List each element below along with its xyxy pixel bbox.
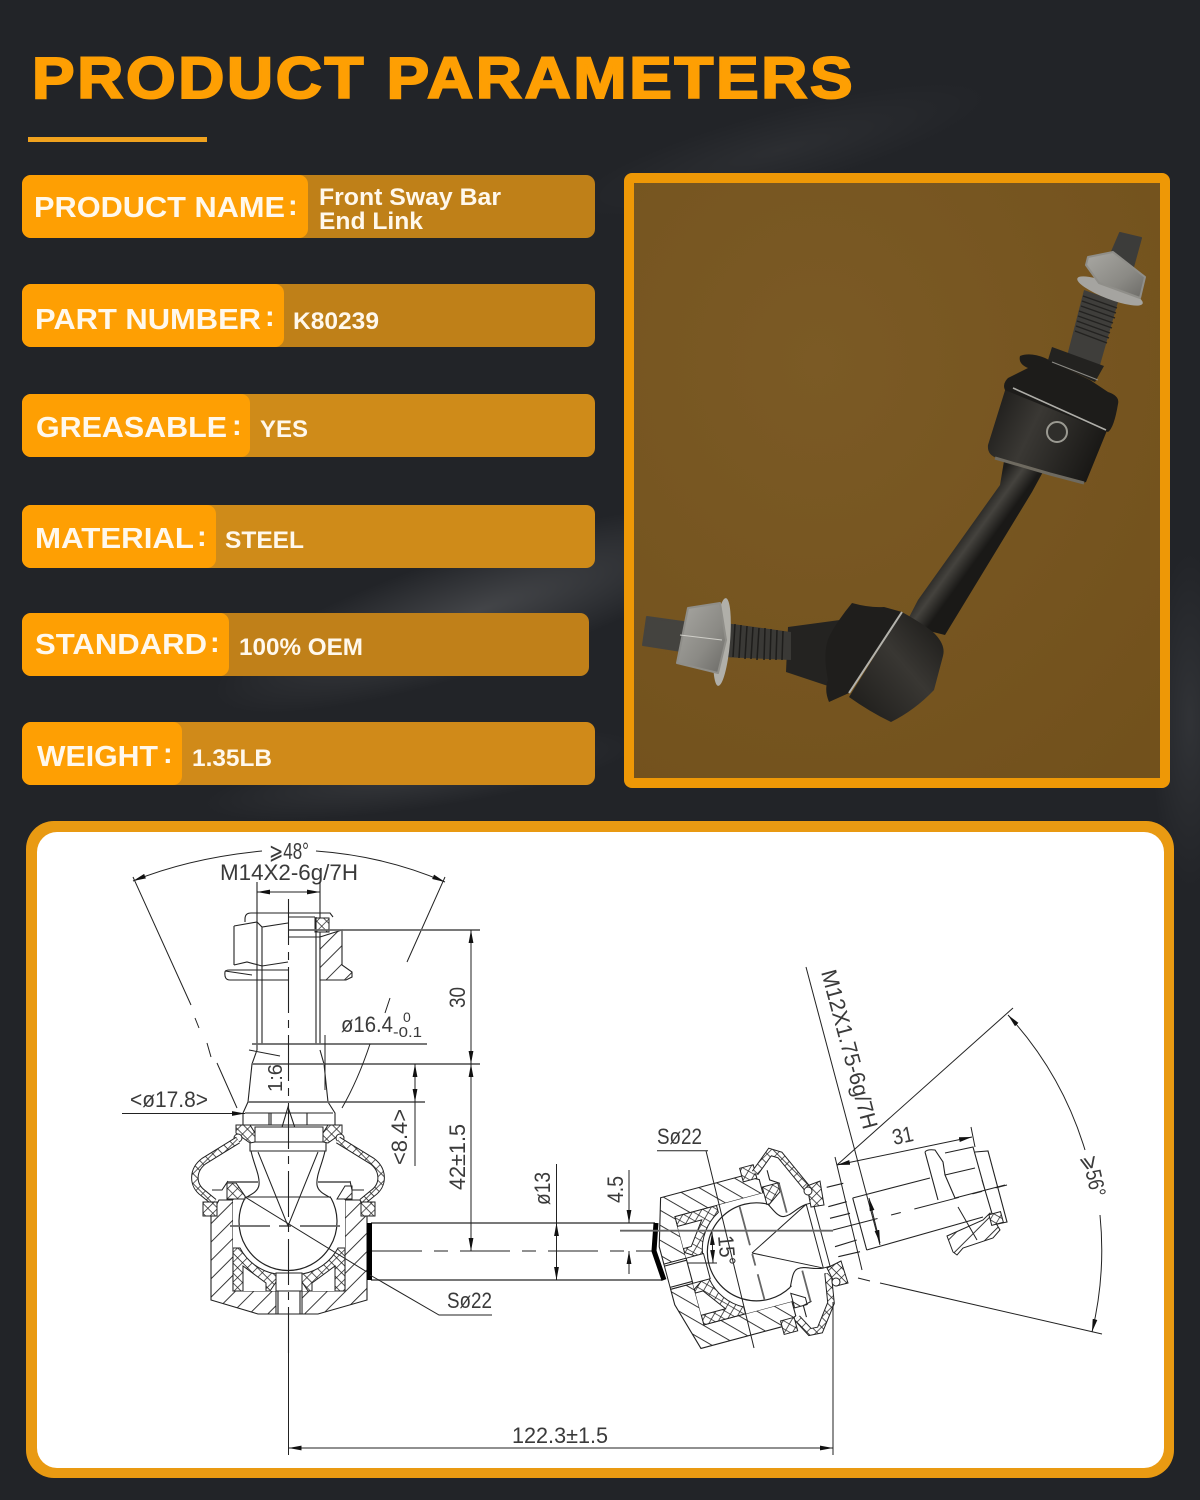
lower boot and cup	[825, 603, 944, 722]
right dimensions: 31	[890, 1121, 916, 1150]
rubber boot	[195, 1140, 381, 1202]
illustration: sway bar end link	[643, 233, 1146, 722]
row: material: STEEL	[225, 527, 304, 554]
right dimensions: Sø22	[657, 1124, 702, 1149]
dimensions: vertical: 42±1.5	[445, 1124, 470, 1190]
lower stud	[643, 597, 840, 690]
right boot	[755, 1152, 848, 1332]
neck and cone lines	[230, 1151, 367, 1272]
drawing: left joint with stud	[133, 838, 480, 1360]
row: part number: :	[265, 301, 275, 333]
row: weight: WEIGHT	[37, 741, 158, 773]
right collar steps	[827, 1183, 860, 1257]
row: standard: 100% OEM	[239, 634, 363, 661]
row: weight: 1.35LB	[192, 745, 272, 772]
row: product name	[22, 175, 595, 238]
angle dimension 48 degrees: M14X2-6g/7H	[220, 860, 358, 885]
row: weight: :	[163, 738, 173, 770]
panel: product photo	[624, 173, 1170, 788]
row: part number: K80239	[293, 308, 379, 335]
angle dimension 48 degrees	[133, 838, 445, 1108]
dimensions: vertical: 30	[445, 987, 470, 1008]
rod	[905, 455, 1044, 635]
dimensions: vertical: 4.5	[603, 1176, 628, 1203]
dimensions: vertical: ø16.4	[341, 1012, 393, 1037]
rotated housing copy	[645, 1159, 818, 1360]
row: part number	[22, 284, 595, 347]
right dimensions: 122.3±1.5	[512, 1423, 608, 1448]
rotated neck	[740, 1188, 834, 1299]
housing, ball and bearing	[203, 1181, 375, 1314]
row: standard: :	[210, 627, 220, 659]
dimensions: vertical: <8.4>	[387, 1109, 412, 1165]
row: greasable: GREASABLE	[36, 412, 227, 444]
upper boot and cup	[988, 347, 1118, 483]
dimensions: vertical: 1:6	[265, 1064, 287, 1092]
thread dimension	[257, 882, 320, 1050]
row: product name: :	[288, 190, 298, 222]
dimensions: vertical: -0.1	[393, 1024, 422, 1041]
row: standard	[22, 613, 589, 676]
dimensions: vertical: 0	[403, 1009, 411, 1025]
row: material	[22, 505, 595, 568]
dimensions: vertical	[122, 930, 629, 1280]
title: PRODUCT PARAMETERS	[32, 46, 853, 110]
rod	[367, 1223, 662, 1280]
right dimensions: ⩾56°	[1077, 1153, 1111, 1199]
right dimensions: M12X1.75-6g/7H	[816, 967, 883, 1132]
right dimensions: 15°	[713, 1234, 741, 1266]
upper stud	[1066, 233, 1146, 372]
row: product name: Front Sway Bar	[319, 184, 501, 211]
row: greasable	[22, 394, 595, 457]
row: product name: End Link	[319, 208, 424, 235]
angle dimension 48 degrees: ⩾48°	[269, 838, 309, 864]
right stud and nut	[833, 1147, 1007, 1255]
nut section	[225, 913, 480, 1044]
drawing: right joint with stud	[288, 967, 1111, 1455]
title underline	[28, 137, 207, 142]
row: weight	[22, 722, 595, 785]
panel: technical drawing	[26, 821, 1174, 1478]
row: product name: PRODUCT NAME	[34, 192, 285, 224]
row: part number: PART NUMBER	[35, 304, 261, 336]
row: standard: STANDARD	[35, 629, 207, 661]
right black bar	[654, 1223, 664, 1280]
center line	[288, 899, 290, 1360]
row: material: :	[197, 521, 207, 553]
dimensions: vertical: ø13	[530, 1172, 555, 1205]
collar seal	[234, 1125, 344, 1151]
row: greasable: :	[232, 410, 242, 442]
label: S diameter 22 left	[370, 1275, 492, 1315]
row: greasable: YES	[260, 416, 308, 443]
row: material: MATERIAL	[35, 523, 194, 555]
taper section	[243, 1035, 480, 1134]
label: S diameter 22 left: Sø22	[447, 1288, 492, 1313]
right dimensions	[288, 967, 1111, 1455]
dimensions: vertical: <ø17.8>	[130, 1087, 208, 1112]
